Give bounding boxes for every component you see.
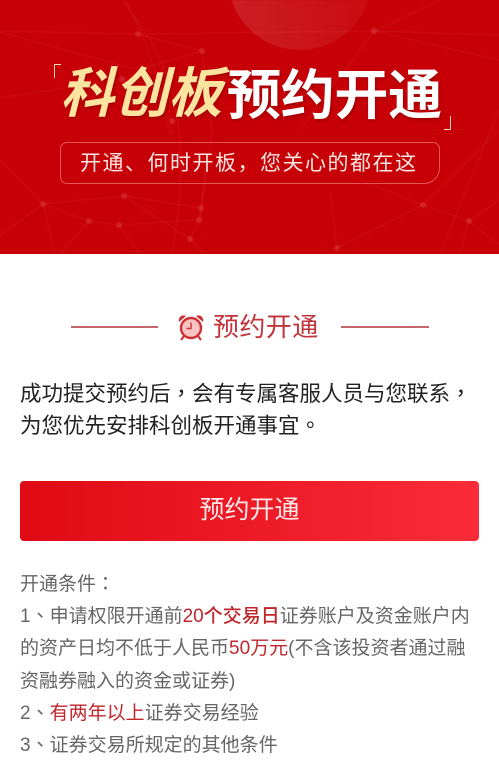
- network background pattern: [0, 0, 499, 254]
- conditions list: 的资产日均不低于人民币50万元(不含该投资者通过融: [20, 638, 465, 659]
- title: highlighted part: 科创板: [60, 64, 222, 124]
- title: white part: 预约开通: [227, 66, 442, 126]
- conditions heading: 开通条件：: [20, 569, 115, 596]
- conditions list: 资融券融入的资金或证券): [20, 671, 235, 692]
- button: [20, 481, 479, 541]
- section heading: [71, 312, 429, 342]
- banner: [0, 0, 499, 254]
- heading right line: [341, 326, 429, 328]
- subtitle text: 开通、何时开板，您关心的都在这: [80, 152, 418, 175]
- heading left line: [71, 326, 158, 328]
- condition 3: 3、证券交易所规定的其他条件: [20, 730, 278, 757]
- condition 2: 2、有两年以上证券交易经验: [20, 698, 259, 725]
- intro paragraph: 为您优先安排科创板开通事宜。: [20, 408, 321, 440]
- button: 预约开通: [199, 496, 300, 524]
- condition 1: 1、申请权限开通前20个交易日证券账户及资金账户内: [20, 601, 470, 628]
- conditions list: [20, 569, 470, 757]
- subtitle pill: [60, 142, 440, 184]
- right corner bracket: [444, 116, 451, 130]
- heading text: 预约开通: [213, 312, 319, 342]
- intro paragraph: 成功提交预约后，会有专属客服人员与您联系，: [20, 377, 472, 408]
- left corner bracket: [54, 64, 61, 78]
- intro paragraph: [20, 377, 472, 440]
- icon: alarm clock: [178, 315, 204, 341]
